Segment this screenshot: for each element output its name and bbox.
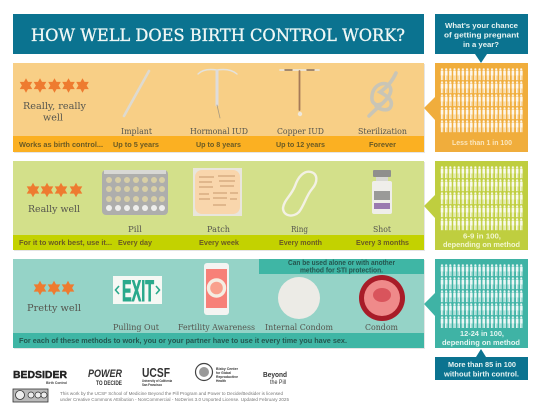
panel: chance 12-24 in 100 [424,259,528,348]
rating label [23,101,87,124]
icon: sterilization knot [369,73,396,116]
rating label: Really, really [23,101,87,112]
method labels [113,323,398,332]
question callout: in a year? [463,40,499,49]
title: HOW WELL DOES BIRTH CONTROL WORK? [31,26,405,46]
title [13,14,424,54]
rating label: Pretty well [27,303,81,314]
license text: under Creative Commons Attribution - NonCommercial - NoDerivs 3.0 Unported License. Updated February 2025 [60,397,289,402]
rating stars: four [27,183,82,197]
icon: shot vial [372,170,392,214]
rating label: well [43,112,63,124]
duration strip: Works as birth control... [19,140,103,149]
Creative Commons badge [13,389,48,402]
icon: copper IUD [280,70,319,116]
logo: UCSF [142,365,172,387]
panel: pretty well [13,258,425,349]
method labels: Fertility Awareness [178,323,255,332]
panel: chance less than 1 in 100: Less than 1 in 100 [452,138,512,147]
logo: UCSF: UCSF [142,365,170,380]
panel: chance 6-9 in 100: 6-9 in 100, [463,232,501,240]
frequency strip: Every day [118,238,152,247]
icon: exit sign: EXIT [122,275,154,308]
icon: pill pack [102,170,168,215]
logo: Power to Decide [88,368,122,387]
method labels: Implant [121,127,153,136]
method labels: Pulling Out [113,323,160,332]
method labels: Ring [291,225,308,234]
method labels [121,127,407,136]
duration strip [19,140,396,149]
logo: Bixby Center: Bixby Center [216,366,238,371]
method labels: Hormonal IUD [190,127,248,136]
logo: Bedsider: BEDSIDER [13,369,67,381]
frequency strip: Every week [199,238,239,247]
method labels: Sterilization [358,127,407,136]
logo: Bixby Center [196,364,239,383]
duration strip: Up to 12 years [276,140,325,149]
icon: vaginal ring [283,172,316,215]
panel: chance 12-24 in 100: depending on method [442,338,520,347]
rating label: Really well [28,204,80,215]
logo: Bixby Center: Health [216,378,226,383]
callout: without birth control: without birth control. [443,370,519,378]
duration strip: Up to 8 years [196,140,241,149]
duration strip: Forever [369,140,396,149]
panel: chance 6-9 in 100 [424,161,528,250]
method labels: Shot [373,225,392,234]
question callout [435,14,528,63]
STI protection note: method for STI protection. [300,266,383,274]
license text: This work by the UCSF School of Medicine Beyond the Pill Program and Power to Decide/Bedsider is licensed [60,391,283,396]
STI protection note [259,258,424,274]
icon: patch [193,168,242,216]
panel: really, really well [13,63,425,153]
panel: chance 12-24 in 100: 12-24 in 100, [460,329,504,338]
logo: Bedsider: Birth Control [46,381,67,385]
logo: UCSF: University of California [142,379,172,383]
icon: implant [124,71,149,116]
rating stars: three [34,281,74,295]
icon: condom [359,275,405,321]
logo: Power to Decide: POWER [88,368,122,380]
method labels: Patch [207,225,230,234]
icon: exit sign [113,275,162,308]
frequency strip: Every month [279,238,322,247]
logo: Beyond the Pill: Beyond [263,372,287,379]
logo: Beyond the Pill: the Pill [270,380,286,386]
license text [60,391,289,402]
logo: UCSF: San Francisco [142,383,162,387]
icon: hormonal IUD [198,70,237,118]
panel: chance 6-9 in 100: depending on method [443,240,520,249]
usage strip: For each of these methods to work, you or your partner have to use it every time you have sex. [19,336,347,345]
question callout: What's your chance [445,21,518,30]
logo: Bixby Center: Reproductive [216,374,239,379]
logo: Bixby Center: for Global [216,370,231,375]
frequency strip: Every 3 months [356,238,409,247]
method labels: Internal Condom [265,323,333,332]
frequency strip: For it to work best, use it... [19,238,112,247]
method labels: Pill [128,225,142,234]
rating stars: five [20,78,89,93]
callout: without birth control [435,349,528,380]
duration strip: Up to 5 years [113,140,159,149]
icon: fertility app phone [204,263,229,315]
logo: Power to Decide: TO DECIDE [96,380,122,387]
method labels [128,225,392,234]
frequency strip [19,238,409,247]
method labels: Copper IUD [277,127,324,136]
callout: without birth control: More than 85 in 100 [448,360,516,369]
panel: chance less than 1 in 100 [424,63,528,152]
STI protection note: Can be used alone or with another [288,258,395,267]
icon: internal condom [278,277,320,319]
question callout: of getting pregnant [444,30,520,40]
panel: really well [13,161,425,251]
logo: Beyond the Pill [263,372,287,386]
method labels: Condom [365,323,398,332]
